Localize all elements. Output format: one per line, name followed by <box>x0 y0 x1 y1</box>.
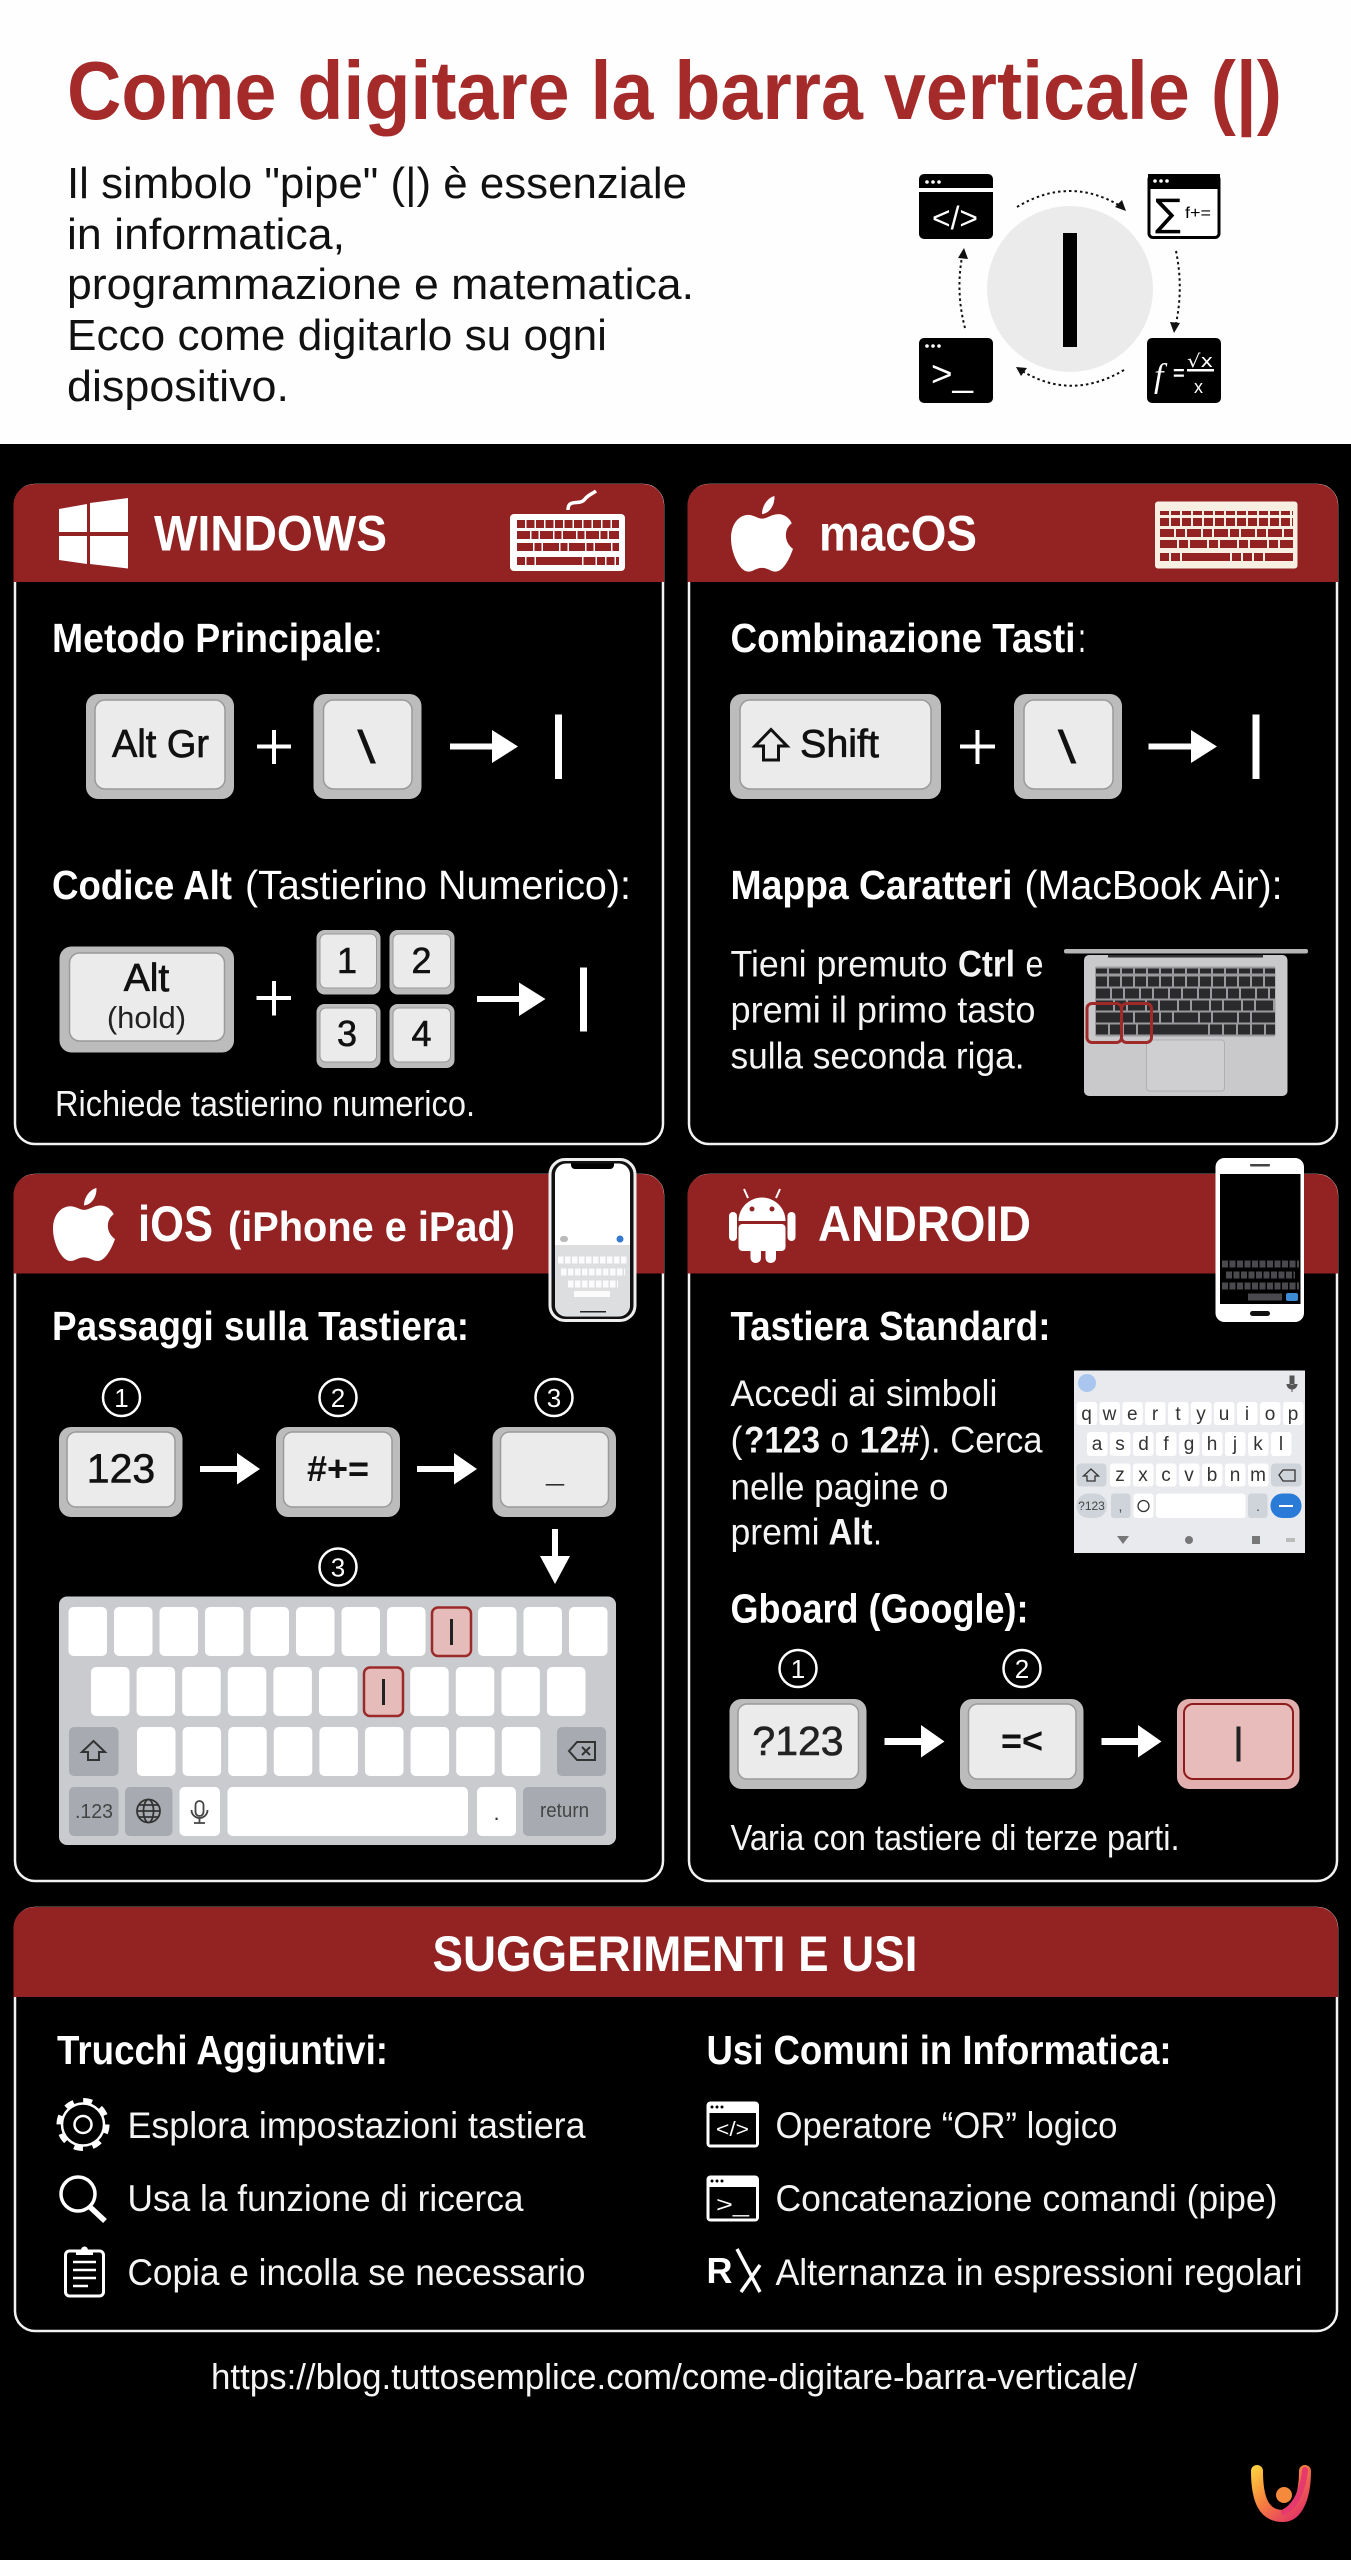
key: shift: Shift <box>800 723 879 766</box>
key: =< <box>960 1699 1084 1789</box>
key: underscore: _ <box>545 1448 565 1489</box>
image: gboard keyboard: j <box>1232 1434 1237 1455</box>
icon: code window <box>706 2102 759 2148</box>
key: backslash <box>1014 694 1122 799</box>
image: gboard keyboard: v <box>1184 1465 1194 1486</box>
intro text: Il simbolo "pipe" (|) è essenziale <box>67 159 687 208</box>
image: gboard keyboard: a <box>1092 1434 1103 1455</box>
arrow <box>884 1725 944 1758</box>
image: gboard keyboard: s <box>1115 1434 1125 1455</box>
panel: tips and uses <box>14 1907 1338 2331</box>
image: gboard keyboard: n <box>1230 1465 1240 1486</box>
icon: function window: = <box>1173 363 1185 385</box>
step numbers: 1 <box>114 1383 129 1413</box>
icon: windows logo <box>59 498 128 568</box>
instructions text: ). Cerca <box>920 1420 1043 1460</box>
image: gboard keyboard: i <box>1245 1404 1249 1425</box>
image: gboard keyboard: t <box>1175 1404 1181 1425</box>
heading: mappa caratteri <box>730 862 1282 908</box>
icon: code window <box>919 174 993 239</box>
logo <box>1257 2470 1305 2516</box>
instructions text: Tieni premuto <box>730 944 948 984</box>
numpad keys: 2 <box>411 940 432 981</box>
step numbers: 3 <box>331 1552 345 1582</box>
icon: code window: </> <box>932 200 978 236</box>
arrow <box>1102 1725 1162 1758</box>
key: alt hold <box>60 946 234 1052</box>
key: 123 <box>59 1427 182 1517</box>
key: backslash: \ <box>357 721 376 773</box>
highlight: keys <box>1087 1004 1152 1042</box>
tip: copia: Copia e incolla se necessario <box>128 2252 586 2293</box>
icon: function window: x <box>1194 377 1203 397</box>
icon: function window: √x <box>1187 351 1213 372</box>
heading: codice alt: (Tastierino Numerico): <box>245 862 631 908</box>
icon: terminal window: >_ <box>716 2192 750 2217</box>
instructions text: . <box>873 1512 882 1552</box>
image: gboard keyboard: m <box>1250 1465 1266 1486</box>
tips header bar: SUGGERIMENTI E USI <box>432 1926 918 1982</box>
icon: android robot <box>729 1189 796 1263</box>
image: macbook air <box>1064 949 1308 1096</box>
instructions text: o <box>830 1420 849 1460</box>
icon: terminal window <box>919 338 993 403</box>
intro text: Ecco come digitarlo su ogni <box>67 311 607 360</box>
function keys <box>69 1727 606 1836</box>
step markers <box>103 1379 572 1586</box>
key: alt gr: Alt Gr <box>112 723 209 766</box>
result pipe <box>580 968 587 1032</box>
instructions text: Accedi ai simboli <box>730 1373 998 1414</box>
result pipe <box>555 714 562 779</box>
heading: codice alt: Codice Alt <box>52 862 232 908</box>
instructions text <box>730 1373 1043 1552</box>
instructions text: ?123 <box>744 1420 820 1460</box>
use: alternanza: Alternanza in espressioni regolari <box>776 2252 1302 2293</box>
note: numeric keypad: Richiede tastierino numerico. <box>55 1083 475 1124</box>
keyboard: ios: return <box>540 1800 589 1822</box>
arrow down <box>540 1529 570 1584</box>
icon: terminal window <box>706 2176 759 2222</box>
image: gboard keyboard: r <box>1152 1404 1159 1425</box>
ios heading: (iPhone e iPad) <box>228 1203 515 1250</box>
image: gboard keyboard: ?123 <box>1078 1499 1105 1513</box>
key: underscore <box>492 1427 616 1517</box>
intro text: in informatica, <box>67 210 345 259</box>
image: gboard keyboard: d <box>1138 1434 1149 1455</box>
intro text <box>67 159 694 411</box>
image: gboard keyboard: k <box>1253 1434 1263 1455</box>
image: gboard keyboard: b <box>1207 1465 1217 1486</box>
key: pipe highlighted <box>1177 1699 1300 1789</box>
heading: combinazione tasti: Combinazione Tasti <box>730 615 1076 661</box>
icon: function window: f <box>1154 358 1168 395</box>
step markers <box>780 1650 1040 1687</box>
note: third-party keyboards: Varia con tastiere di terze parti. <box>730 1817 1180 1858</box>
arrow <box>450 730 518 763</box>
tip: ricerca: Usa la funzione di ricerca <box>128 2178 524 2219</box>
instructions text: e <box>1026 944 1044 984</box>
image: gboard keyboard <box>1074 1370 1305 1553</box>
key: alt hold: Alt <box>124 957 169 1000</box>
image: gboard keyboard: l <box>1279 1434 1283 1455</box>
macos header bar <box>688 484 1338 582</box>
instructions text <box>730 944 1044 1076</box>
instructions text: Alt <box>828 1512 872 1552</box>
icon: gear <box>59 2100 107 2148</box>
numpad keys <box>316 930 454 1068</box>
heading: tastiera standard: Tastiera Standard: <box>730 1303 1050 1349</box>
key: symbols <box>276 1427 400 1517</box>
key: shift <box>730 694 941 799</box>
macos heading: macOS <box>819 506 977 562</box>
use: concatenazione: Concatenazione comandi (pipe) <box>776 2178 1278 2219</box>
heading: mappa caratteri: Mappa Caratteri <box>730 862 1012 908</box>
keyboard: ios <box>59 1596 616 1845</box>
step numbers <box>791 1654 1029 1684</box>
heading: passaggi: Passaggi sulla Tastiera: <box>52 1303 469 1349</box>
key: 123: 123 <box>87 1446 155 1492</box>
icon: regex: R <box>706 2250 732 2291</box>
numpad keys: 1 <box>337 940 357 981</box>
heading: gboard: Gboard (Google): <box>730 1586 1028 1632</box>
instructions text: premi <box>730 1512 820 1552</box>
heading: trucchi aggiuntivi: Trucchi Aggiuntivi: <box>57 2027 388 2073</box>
arrow <box>1148 730 1217 763</box>
instructions text: premi il primo tasto <box>730 990 1036 1030</box>
arrow <box>200 1453 260 1484</box>
icon: regex <box>706 2249 760 2292</box>
step numbers <box>114 1383 561 1582</box>
arrow <box>477 982 546 1016</box>
icon: formula window <box>1148 174 1220 238</box>
intro text: dispositivo. <box>67 362 289 411</box>
heading: metodo principale: Metodo Principale <box>52 615 374 661</box>
key: =<: =< <box>1001 1720 1043 1761</box>
image: gboard keyboard: f <box>1163 1434 1169 1455</box>
heading: metodo principale: : <box>374 615 382 661</box>
heading: codice alt <box>52 862 631 908</box>
image: gboard keyboard: c <box>1161 1465 1171 1486</box>
plus <box>960 730 995 764</box>
panel: ios <box>14 1160 664 1881</box>
key: alt gr <box>86 694 234 799</box>
android header bar <box>688 1174 1338 1274</box>
image: gboard keyboard: z <box>1115 1465 1125 1486</box>
icon: formula window: ∑ <box>1155 191 1181 235</box>
ios header bar <box>14 1174 664 1274</box>
image: gboard keyboard: g <box>1184 1434 1194 1455</box>
key: backslash: \ <box>1058 721 1077 773</box>
instructions text: ( <box>730 1420 743 1460</box>
icon: formula window: f+= <box>1185 205 1211 222</box>
icon: apple logo <box>731 496 793 572</box>
step numbers: 3 <box>547 1383 561 1413</box>
windows header bar <box>14 484 664 582</box>
instructions text: nelle pagine o <box>730 1466 948 1508</box>
keyboard: ios: . <box>493 1800 500 1825</box>
numpad keys: 4 <box>411 1013 432 1054</box>
step numbers: 2 <box>1015 1654 1029 1684</box>
panel: windows <box>14 484 664 1144</box>
image: gboard keyboard: y <box>1196 1404 1206 1425</box>
panel: android <box>688 1158 1338 1881</box>
icon: code window: </> <box>716 2119 749 2141</box>
key: alt hold: (hold) <box>107 1000 186 1035</box>
icon: keyboard <box>1155 502 1298 568</box>
key: symbols: #+= <box>307 1448 369 1489</box>
heading: usi comuni: Usi Comuni in Informatica: <box>706 2027 1172 2073</box>
step numbers: 2 <box>331 1383 345 1413</box>
image: gboard keyboard: x <box>1138 1465 1148 1486</box>
tips header bar <box>14 1907 1338 1997</box>
instructions text: Ctrl <box>958 944 1015 984</box>
android heading: ANDROID <box>818 1196 1031 1252</box>
numpad keys: 3 <box>337 1013 357 1054</box>
windows heading: WINDOWS <box>154 506 387 562</box>
heading: combinazione tasti: : <box>1078 615 1086 661</box>
ios heading: iOS <box>138 1196 213 1252</box>
ios heading <box>138 1196 515 1252</box>
image: gboard keyboard: e <box>1127 1404 1138 1425</box>
icon: terminal window: >_ <box>931 353 974 394</box>
image: gboard keyboard: p <box>1288 1404 1298 1425</box>
icon: function window <box>1147 338 1221 403</box>
icon: apple logo <box>53 1188 115 1261</box>
header section <box>0 0 1351 444</box>
result pipe <box>1252 714 1260 779</box>
highlighted pipe keys <box>364 1608 471 1716</box>
image: iphone <box>550 1160 635 1320</box>
image: gboard keyboard: , <box>1119 1498 1122 1514</box>
step numbers: 1 <box>791 1654 805 1684</box>
icon: pipe symbol with orbiting windows <box>919 174 1221 403</box>
icon: search <box>61 2177 105 2221</box>
image: gboard keyboard: u <box>1219 1404 1229 1425</box>
key: ?123: ?123 <box>752 1718 844 1764</box>
image: gboard keyboard: . <box>1256 1498 1260 1514</box>
intro text: programmazione e matematica. <box>67 260 694 309</box>
image: gboard keyboard: h <box>1207 1434 1217 1455</box>
image: gboard keyboard: q <box>1081 1404 1092 1425</box>
icon: keyboard with cable <box>510 491 625 571</box>
heading: mappa caratteri: (MacBook Air): <box>1024 862 1282 908</box>
image: android phone <box>1216 1158 1304 1322</box>
instructions text: sulla seconda riga. <box>730 1036 1024 1076</box>
source url: https://blog.tuttosemplice.com/come-digitare-barra-verticale/ <box>211 2356 1137 2397</box>
keyboard: ios: .123 <box>75 1801 113 1823</box>
arrow <box>417 1453 477 1484</box>
instructions text: 12# <box>860 1420 920 1460</box>
image: gboard keyboard: o <box>1265 1404 1275 1425</box>
key: ?123 <box>730 1699 866 1789</box>
plus <box>257 730 291 764</box>
panel: macos <box>688 484 1338 1144</box>
key: backslash <box>314 694 422 799</box>
use: operatore or: Operatore “OR” logico <box>776 2105 1118 2146</box>
tip: tastiera: Esplora impostazioni tastiera <box>128 2105 586 2146</box>
image: gboard keyboard: w <box>1102 1404 1117 1425</box>
plus <box>256 981 291 1016</box>
icon: clipboard <box>66 2246 104 2296</box>
